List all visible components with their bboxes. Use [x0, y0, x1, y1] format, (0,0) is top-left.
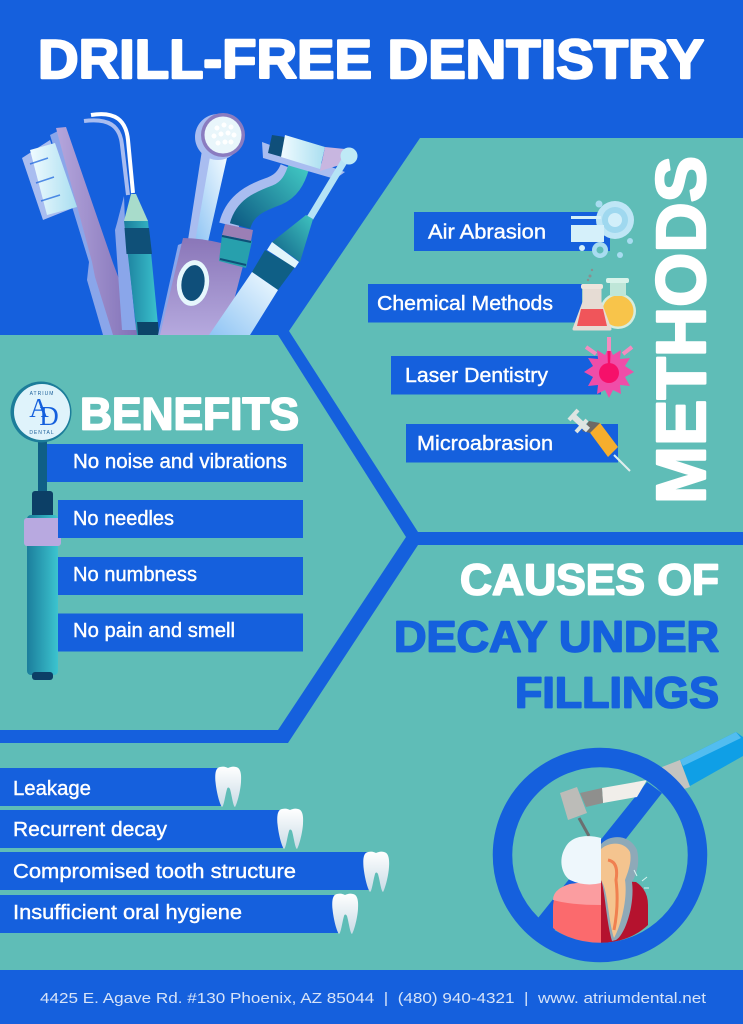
cause: compromised tooth structure — [0, 852, 389, 892]
panel: causes background — [0, 545, 743, 970]
icon: dental probe — [84, 114, 159, 335]
method: laser dentistry — [391, 337, 634, 398]
cause: recurrent decay: Recurrent decay — [13, 819, 167, 841]
mirror logo: D — [39, 401, 59, 431]
list: methods — [368, 200, 636, 471]
method: chemical methods: Chemical Methods — [377, 293, 553, 315]
icon: laser burst — [584, 337, 634, 398]
icon: tooth cross-section — [553, 836, 649, 943]
footer bar — [0, 971, 743, 1024]
list: causes — [0, 767, 389, 934]
footer contact: 4425 E. Agave Rd. #130 Phoenix, AZ 85044 | (480) 940-4321 | www. atriumdental.net — [40, 990, 707, 1007]
method: chemical methods — [368, 269, 636, 329]
mirror handle — [24, 438, 61, 680]
benefit: no noise — [47, 444, 303, 482]
benefit: no numbness: No numbness — [73, 564, 197, 586]
heading: methods: METHODS — [642, 156, 720, 504]
mirror logo — [10, 382, 72, 442]
heading: causes of decay under fillings: DECAY UNDER — [394, 612, 719, 662]
cause: recurrent decay — [0, 809, 303, 849]
cause: insufficient oral hygiene: Insufficient oral hygiene — [13, 902, 242, 924]
no symbol ring — [502, 758, 698, 952]
heading: causes of decay under fillings — [394, 556, 719, 718]
icon: electric toothbrush — [158, 113, 245, 335]
benefit: no noise: No noise and vibrations — [73, 451, 287, 473]
panel: methods background — [289, 138, 743, 532]
mirror logo: A — [29, 393, 49, 423]
icon: air swirl — [571, 200, 634, 258]
icon: toothbrush — [22, 127, 140, 335]
benefit: no pain: No pain and smell — [73, 620, 235, 642]
benefit: no needles: No needles — [73, 508, 174, 530]
cause: leakage: Leakage — [13, 778, 91, 800]
method: air abrasion — [414, 200, 634, 258]
diagonal bar — [538, 782, 662, 932]
mirror logo: ATRIUM — [30, 391, 54, 397]
title: DRILL-FREE DENTISTRY — [38, 28, 704, 90]
icon: syringe — [569, 410, 630, 471]
benefit: no needles — [58, 500, 303, 538]
cause: insufficient oral hygiene — [0, 894, 358, 934]
heading: causes of decay under fillings: CAUSES OF — [460, 556, 719, 604]
mirror logo: DENTAL — [29, 430, 55, 436]
panel: benefits background — [0, 335, 406, 730]
list: benefits — [47, 444, 303, 652]
icon: flasks — [574, 269, 636, 329]
method: microabrasion — [406, 410, 630, 471]
illustration: no drilling sign — [502, 732, 743, 952]
heading: benefits: BENEFITS — [80, 388, 299, 440]
icon: curved scaler — [219, 135, 345, 268]
method: air abrasion: Air Abrasion — [428, 222, 546, 244]
icon: scaler with white handle — [209, 148, 358, 335]
benefit: no numbness — [58, 557, 303, 595]
icon: dental drill — [560, 732, 743, 836]
heading: causes of decay under fillings: FILLINGS — [515, 668, 719, 718]
benefit: no pain — [58, 614, 303, 652]
illustration: dental mirror — [10, 382, 72, 680]
illustration: dental tools — [22, 113, 358, 335]
cause: compromised tooth structure: Compromised tooth structure — [13, 861, 296, 883]
cause: leakage — [0, 767, 241, 807]
method: microabrasion: Microabrasion — [417, 433, 553, 455]
method: laser dentistry: Laser Dentistry — [405, 365, 548, 387]
